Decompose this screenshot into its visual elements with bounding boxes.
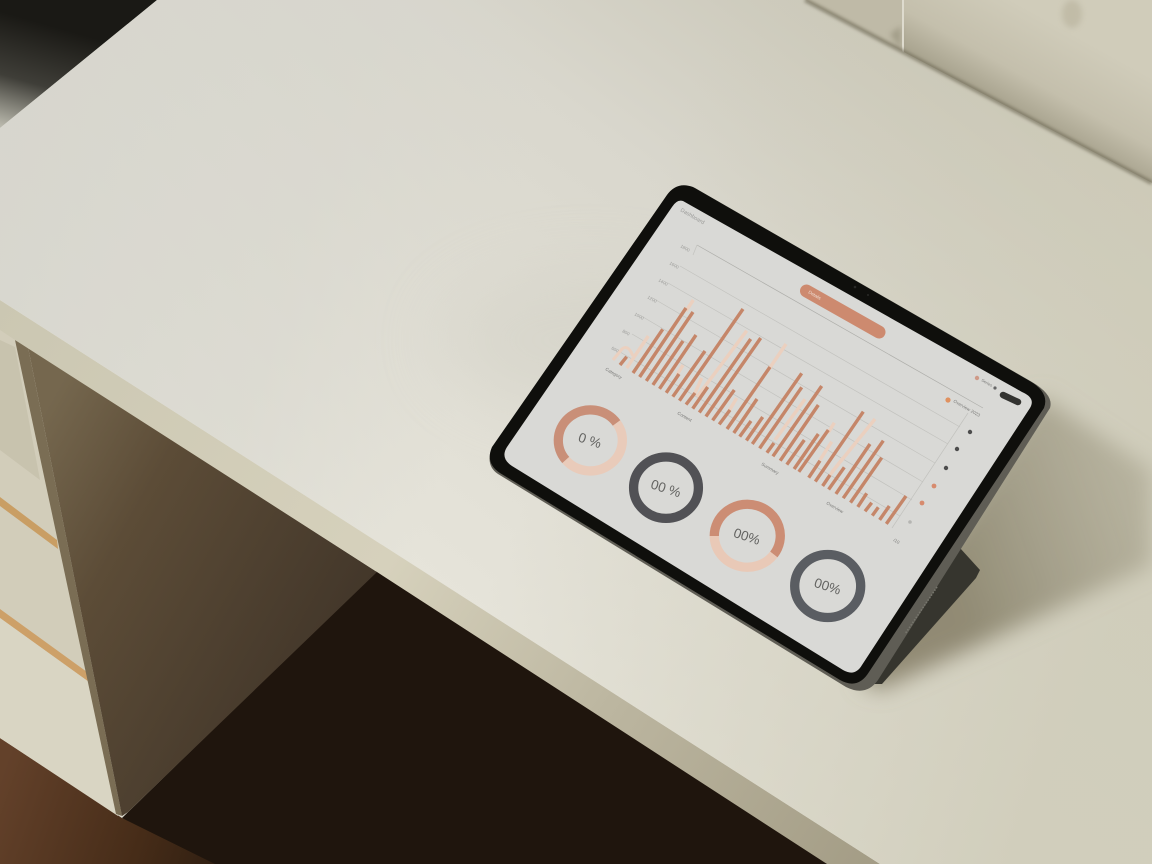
wall panels [800,0,1152,200]
tablet stand [868,548,980,684]
drawer unit [0,325,122,816]
floor [0,570,830,864]
desk front edge [0,300,880,864]
desk leg [15,340,377,816]
x axis labels: Category [604,367,623,380]
camera dots [854,286,869,296]
y axis labels: 1600 [668,261,680,270]
tablet screen [504,201,1032,673]
x axis labels: Overview [826,501,845,515]
header pill button: Details [808,290,823,301]
x axis labels: /10 [892,538,901,545]
x axis labels [604,367,901,545]
legend top right: Series [980,378,993,388]
y axis labels: 1400 [658,278,669,287]
donut 4 [795,554,861,618]
donut 4: 00% [812,575,843,598]
y axis labels: 800 [622,329,631,337]
y axis labels [610,244,691,354]
y axis labels: 600 [610,346,620,354]
tablet metal edge [490,186,1051,691]
donut 3 [714,504,780,567]
donut 3: 00% [732,525,762,548]
speaker dots [905,587,937,634]
right dot series [908,430,972,524]
drawer handle strip upper [0,497,58,549]
wall contact shadow [805,0,1152,183]
donut 1: 0 % [576,430,603,451]
donut 1 [558,410,622,471]
donut 2: 00 % [649,477,683,500]
chart gridlines and axes [620,245,983,528]
tablet [490,185,1051,691]
y axis labels: 1000 [634,312,645,321]
dark background corner [0,0,165,135]
header pill button [806,290,879,332]
legend top right [945,376,1018,418]
y axis labels: 1200 [646,295,658,304]
donut 2 [634,457,698,518]
drawer handle strip lower [0,609,89,682]
legend top right: Overview 2023 [952,399,981,418]
x axis labels: Content [676,411,693,423]
tablet bezel [490,185,1045,684]
bar chart: light series [613,300,875,475]
dashboard title: Dashboard [679,208,705,226]
tablet cast shadow [860,395,1152,690]
bar chart: dark series [620,308,906,524]
y axis labels: 1800 [680,244,691,253]
x axis labels: Summary [760,462,780,476]
